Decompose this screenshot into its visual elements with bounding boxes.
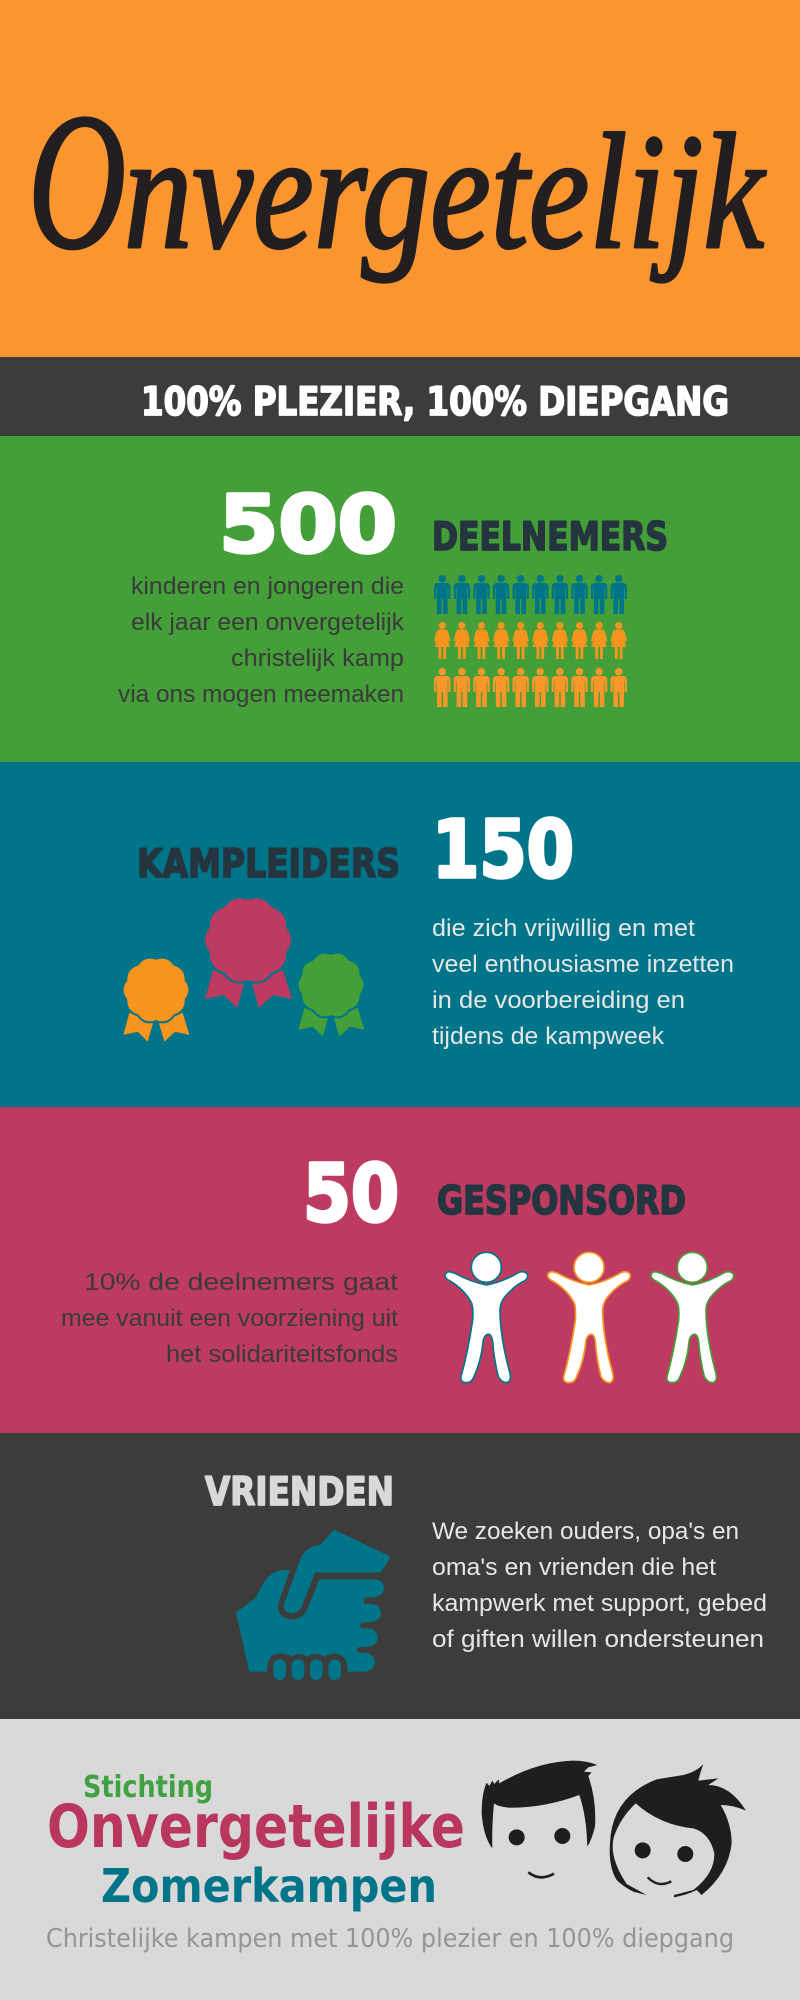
text block: deelnemers description: elk jaar een onvergetelijk [131,609,405,636]
text block: deelnemers description [118,573,405,708]
number 50: 50 [303,1148,399,1240]
panel: vrienden [0,1433,800,1719]
tagline: footer: Christelijke kampen met 100% plezier en 100% diepgang [46,1924,734,1954]
number 500: 500 [219,479,397,571]
heading: deelnemers: DEELNEMERS [432,515,668,560]
icon: pink rosette [204,897,292,1008]
panel: deelnemers [0,436,800,762]
panel: footer [0,1719,800,2000]
icon: green outlined figure [651,1252,734,1383]
text block: kampleiders description: in de voorbereiding en [432,987,685,1014]
text block: gesponsord description: mee vanuit een voorziening uit [61,1305,398,1332]
text block: kampleiders description: veel enthousiasme inzetten [432,951,734,978]
heading: kampleiders: KAMPLEIDERS [137,842,400,887]
number 150: 150 [432,804,574,896]
icon: orange rosette [123,958,189,1042]
text block: kampleiders description: die zich vrijwillig en met [432,915,695,942]
icon: orange outlined figure [548,1252,630,1383]
logo text: zomerkampen: Zomerkampen [101,1859,437,1913]
heading: gesponsord: GESPONSORD [437,1179,686,1224]
panel: title banner [0,0,800,357]
icon: handshake [236,1530,390,1680]
text block: vrienden description: oma's en vrienden die het [432,1554,716,1581]
icon: green rosette [298,953,364,1037]
title: O [28,74,126,290]
text block: gesponsord description: 10% de deelnemers gaat [84,1269,398,1296]
text block: gesponsord description: het solidariteitsfonds [166,1341,398,1368]
text block: deelnemers description: kinderen en jongeren die [131,573,404,600]
text block: gesponsord description [61,1269,398,1368]
heading: vrienden: VRIENDEN [205,1470,394,1515]
icon: people rows [434,575,627,707]
panel: gesponsord [0,1107,800,1433]
text block: deelnemers description: via ons mogen meemaken [118,681,404,708]
icon: boy face [482,1761,597,1877]
icon: teal outlined figure [445,1252,528,1383]
text block: kampleiders description [432,915,734,1050]
text block: deelnemers description: christelijk kamp [231,645,404,672]
text block: vrienden description: of giften willen ondersteunen [432,1626,764,1653]
text block: vrienden description: We zoeken ouders, opa's en [432,1518,739,1545]
text block: vrienden description: kampwerk met support, gebed [432,1590,767,1617]
panel: kampleiders [0,762,800,1107]
logo text: stichting: Stichting [83,1770,213,1805]
icon: girl face [610,1764,746,1897]
logo text: onvergetelijke: Onvergetelijke [47,1792,465,1862]
panel: tagline band [0,357,800,436]
text block: vrienden description [432,1518,767,1653]
text block: kampleiders description: tijdens de kampweek [432,1023,665,1050]
